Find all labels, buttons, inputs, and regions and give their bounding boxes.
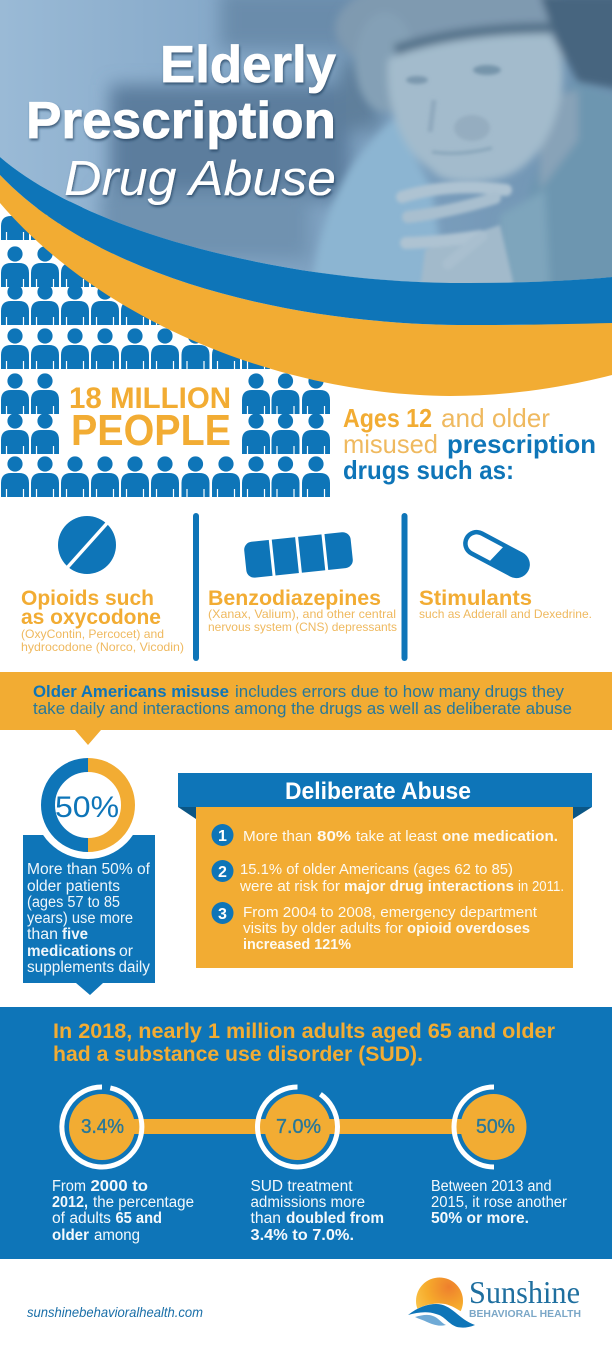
18 million people stat: PEOPLE	[71, 406, 231, 455]
title: Elderly	[160, 36, 336, 94]
blue card	[23, 835, 155, 995]
card text: five	[62, 926, 88, 943]
stat circle: 3.4%	[62, 1087, 142, 1167]
card text: supplements daily	[27, 959, 150, 976]
caption 3	[431, 1178, 567, 1227]
blue band	[0, 157, 612, 325]
caption 2: SUD treatment	[250, 1178, 353, 1195]
panel: opioids	[21, 516, 184, 654]
title: Prescription	[26, 92, 336, 150]
opioids text: hydrocodone (Norco, Vicodin)	[21, 640, 184, 654]
caption 1: 65 and	[116, 1210, 162, 1227]
stat circle: 50%: 50%	[476, 1116, 515, 1138]
stat circle: 7.0%	[258, 1087, 338, 1167]
divider	[193, 513, 199, 661]
benzodiazepines text: nervous system (CNS) depressants	[208, 620, 397, 634]
banner: older Americans misuse: take daily and interactions among the drugs as well as deliberate abuse	[33, 700, 572, 718]
card text: medications	[27, 943, 116, 960]
caption 1: among	[94, 1227, 140, 1244]
item 3: visits by older adults for	[243, 921, 403, 937]
item 3: opioid overdoses	[407, 921, 530, 937]
benzodiazepines text: (Xanax, Valium), and other central	[208, 607, 396, 621]
item 1: take at least	[356, 829, 437, 845]
caption 1: older	[52, 1227, 89, 1244]
panel: 2018 substance use disorder	[0, 1007, 612, 1259]
item 2: major drug interactions	[344, 879, 514, 895]
heading: ages 12 and older: misused	[343, 429, 438, 459]
heading: ages 12 and older: prescription	[447, 429, 596, 459]
heading: ages 12 and older: Ages 12	[343, 403, 432, 433]
heading	[53, 1020, 555, 1066]
ribbon header	[178, 773, 592, 819]
icon: sun and waves	[408, 1278, 475, 1328]
caption 1	[52, 1178, 194, 1244]
item 3: increased 121%	[243, 937, 351, 953]
stimulants text: such as Adderall and Dexedrine.	[419, 607, 592, 621]
banner: older Americans misuse: includes errors due to how many drugs they	[235, 683, 565, 701]
caption 3: 50% or more.	[431, 1210, 529, 1227]
heading: ages 12 and older: drugs such as:	[343, 455, 514, 485]
caption 1: 2012,	[52, 1194, 88, 1211]
caption 2: doubled from	[286, 1210, 384, 1227]
opioids text: Opioids such	[21, 587, 154, 610]
item 1	[212, 824, 558, 846]
18 million people stat	[69, 382, 231, 455]
blue background	[0, 1007, 612, 1259]
caption 1: the percentage	[93, 1194, 194, 1211]
item 2: 15.1% of older Americans (ages 62 to 85)	[240, 862, 513, 878]
panel: benzodiazepines	[208, 529, 397, 634]
icon: segmented tablet	[243, 529, 354, 580]
connector bar	[110, 1119, 490, 1134]
logo: Sunshine Behavioral Health	[408, 1274, 581, 1328]
logo: Sunshine Behavioral Health: BEHAVIORAL HEALTH	[469, 1308, 581, 1320]
benzodiazepines text	[208, 587, 397, 634]
logo: Sunshine Behavioral Health: Sunshine	[469, 1274, 580, 1310]
caption 2: 3.4% to 7.0%.	[250, 1227, 354, 1244]
card text: or	[119, 943, 133, 960]
blue and orange swoosh	[0, 157, 612, 396]
caption 1: From	[52, 1178, 86, 1195]
card text: older patients	[27, 878, 120, 895]
caption 3: 2015, it rose another	[431, 1194, 567, 1211]
caption 1: of adults	[52, 1210, 111, 1227]
icon: round scored pill	[58, 516, 116, 574]
card text: More than 50% of	[27, 861, 151, 878]
people icon grid	[1, 199, 330, 497]
item 2: in 2011.	[518, 879, 564, 895]
opioids text: (OxyContin, Percocet) and	[21, 627, 164, 641]
item 2: 2	[218, 864, 227, 881]
heading: had a substance use disorder (SUD).	[53, 1043, 423, 1066]
caption 2	[250, 1178, 384, 1244]
opioids text	[21, 587, 184, 654]
item 1: 80%	[317, 829, 351, 845]
orange panel	[196, 807, 573, 968]
banner: older Americans misuse: Older Americans misuse	[33, 683, 229, 701]
stat circle: 3.4%: 3.4%	[81, 1116, 124, 1138]
item 3	[212, 902, 537, 953]
18 million people stat: 18 MILLION	[69, 382, 231, 415]
heading: ages 12 and older	[343, 403, 596, 485]
stat circle: 7.0%: 7.0%	[276, 1116, 321, 1138]
caption 2: than	[250, 1210, 281, 1227]
stimulants text: Stimulants	[419, 587, 532, 610]
divider	[402, 513, 408, 661]
caption 3: Between 2013 and	[431, 1178, 552, 1195]
heading: Deliberate Abuse	[285, 778, 471, 805]
item 3: From 2004 to 2008, emergency department	[243, 905, 537, 921]
donut chart: 50%: 50%	[55, 791, 119, 824]
item 3: 3	[218, 906, 227, 923]
donut chart: 50%	[34, 751, 142, 859]
card text: (ages 57 to 85	[27, 894, 120, 911]
stimulants text	[419, 587, 592, 621]
item 2: were at risk for	[239, 879, 340, 895]
website url: sunshinebehavioralhealth.com	[27, 1304, 203, 1320]
photo: elderly woman at a rainy window	[0, 0, 612, 300]
benzodiazepines text: Benzodiazepines	[208, 587, 381, 610]
panel: stimulants	[419, 525, 592, 621]
heading: In 2018, nearly 1 million adults aged 65 and older	[53, 1020, 555, 1043]
opioids text: as oxycodone	[21, 606, 161, 629]
item 1: More than	[243, 829, 312, 845]
orange band	[0, 175, 612, 396]
stat circle: 50%	[454, 1087, 526, 1167]
caption 1: 2000 to	[90, 1178, 148, 1195]
title: Drug Abuse	[64, 152, 336, 206]
banner: older Americans misuse	[0, 672, 612, 745]
card text: years) use more	[27, 910, 133, 927]
panel: 50 percent card	[23, 751, 155, 995]
title	[26, 36, 336, 206]
card text	[27, 861, 151, 976]
caption 2: admissions more	[250, 1194, 365, 1211]
card text: than	[27, 926, 58, 943]
item 2	[212, 860, 564, 895]
heading: ages 12 and older: and older	[441, 403, 550, 433]
panel: deliberate abuse	[178, 773, 592, 968]
item 1: one medication.	[442, 829, 558, 845]
icon: capsule	[458, 525, 535, 583]
item 1: 1	[218, 828, 227, 845]
